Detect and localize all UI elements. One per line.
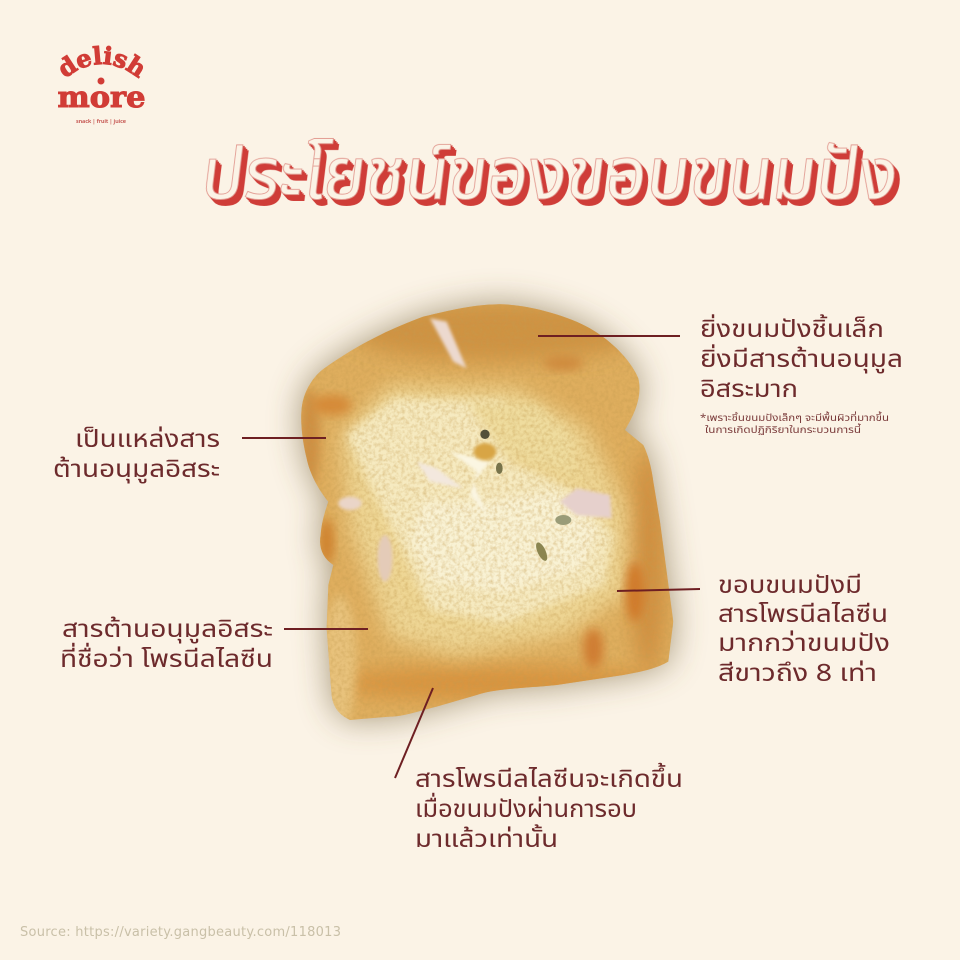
callout text: สารต้านอนุมูลอิสระ — [62, 612, 273, 648]
title: ประโยชน์ของขอบขนมปัง — [195, 122, 904, 232]
callout: baking — [395, 688, 683, 858]
bread grain texture — [313, 349, 673, 718]
callout: smaller pieces: อิสระมาก — [700, 372, 798, 408]
logo tagline: snack | fruit | juice — [76, 118, 127, 126]
callout: 8 times more — [617, 568, 890, 692]
leader line — [395, 688, 433, 778]
callout text: สารโพรนีลไลซีนจะเกิดขึ้น — [415, 762, 683, 798]
callout: antioxidant source: ต้านอนุมูลอิสระ — [53, 452, 220, 488]
callout: pronyl-lysine name — [60, 612, 368, 678]
callout: smaller pieces: ยิ่งมีสารต้านอนุมูล — [700, 342, 903, 378]
bread body — [290, 295, 680, 728]
logo dot — [98, 78, 104, 84]
bread shadow — [301, 304, 673, 720]
logo word: delish: delish — [60, 45, 144, 79]
bread highlights — [430, 318, 467, 368]
callout: antioxidant source — [53, 422, 326, 488]
callout: 8 times more: มากกว่าขนมปัง — [718, 626, 890, 662]
source: Source: https://variety.gangbeauty.com/118013 — [20, 925, 341, 940]
callout: 8 times more: สีขาวถึง 8 เท่า — [718, 656, 877, 692]
footnote: *เพราะชิ้นขนมปังเล็กๆ จะมีพื้นผิวที่มากขึ้น — [700, 411, 889, 426]
callout text: เป็นแหล่งสาร — [75, 422, 220, 458]
callout: baking: เมื่อขนมปังผ่านการอบ — [415, 792, 637, 828]
logo: delish more — [58, 45, 146, 126]
herb specks — [480, 430, 490, 439]
callout: smaller pieces — [538, 312, 903, 408]
callout text: ยิ่งขนมปังชิ้นเล็ก — [700, 312, 884, 348]
leader line — [538, 335, 680, 337]
bread crumb centre — [340, 385, 627, 655]
callout text: ขอบขนมปังมี — [718, 568, 862, 604]
crust accents — [626, 562, 644, 622]
leader line — [284, 628, 368, 630]
callout: 8 times more: สารโพรนีลไลซีน — [718, 597, 888, 633]
image: toasted bread slice — [290, 295, 680, 728]
leader line — [617, 589, 700, 591]
callout: baking: มาแล้วเท่านั้น — [415, 822, 558, 858]
logo word: more: more — [58, 80, 146, 114]
callout: pronyl-lysine name: ที่ชื่อว่า โพรนีลไลซีน — [60, 642, 273, 678]
leader line — [242, 437, 326, 439]
footnote — [700, 411, 889, 438]
footnote: ในการเกิดปฏิกิริยาในกระบวนการนี้ — [705, 423, 861, 438]
